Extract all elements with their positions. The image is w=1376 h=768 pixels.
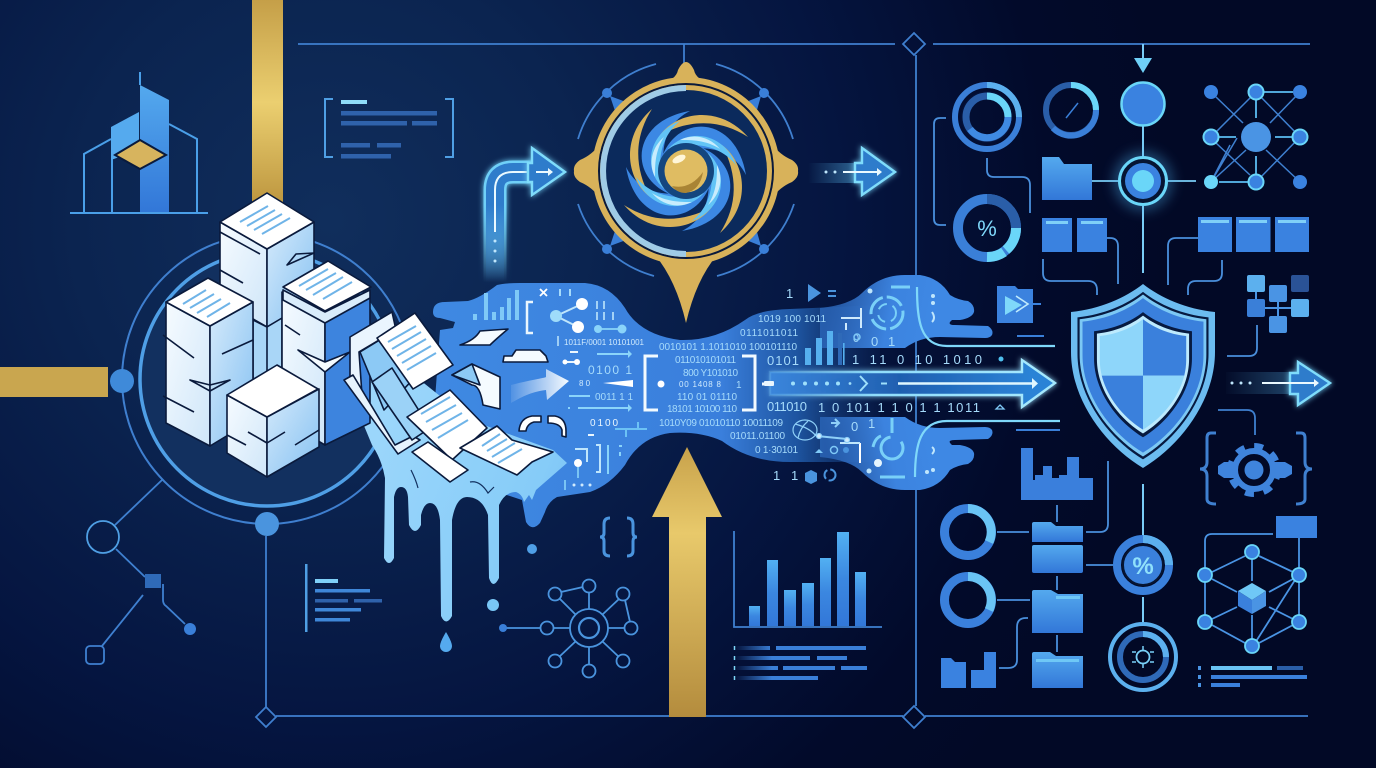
ring icon top <box>871 297 903 329</box>
binary text: stream right: 1 0 101 1 1 0 1 1 1011 <box>818 400 980 415</box>
binary text: stream center: 18101 10100 110 <box>667 404 737 415</box>
tab blocks left <box>1042 218 1107 252</box>
connector lines right top <box>934 44 1257 356</box>
binary text: stream center: 0 1·30101 <box>755 445 798 456</box>
paper sheet 2 <box>407 390 487 460</box>
binary text: stream center: 1019 100 1011 <box>758 314 826 325</box>
binary text: stream right: 1 <box>791 468 798 483</box>
top frame line with diamond <box>298 33 1310 706</box>
gold core <box>658 143 714 199</box>
folder-play icon <box>997 286 1041 323</box>
tab blocks right <box>1198 217 1309 252</box>
binary text: stream right: 1 <box>786 286 793 301</box>
folder stack <box>1032 522 1083 688</box>
binary text: stream center: 01011.01100 <box>730 431 785 442</box>
document stack: front <box>227 365 319 477</box>
arrowhead top <box>1134 58 1152 73</box>
binary text: stream right: 1 <box>888 334 895 349</box>
braces icon bottom center <box>600 518 637 556</box>
binary text: stream center: 1 <box>736 380 742 391</box>
node: circle left <box>110 369 134 393</box>
graph cube <box>1198 516 1317 653</box>
hub network icon <box>499 580 638 678</box>
connector lines right bottom <box>997 461 1143 668</box>
vortex emblem <box>574 62 798 323</box>
donut B <box>1046 85 1096 136</box>
ring icon bottom <box>873 418 903 459</box>
stream icons: right glyphs <box>793 284 1060 484</box>
swoosh arrow into vortex <box>494 148 565 282</box>
short lines near folder icon <box>1016 336 1060 430</box>
binary text: stream center: 011010101011 <box>675 355 736 366</box>
binary text: stream center <box>579 314 826 456</box>
text block: lower left lines <box>305 564 382 632</box>
paper flakes <box>452 329 566 437</box>
binary text: stream right: 1 <box>868 416 875 431</box>
node cluster <box>527 289 626 346</box>
binary text: stream right: 1 11 0 10 1010 <box>852 352 982 367</box>
middle data arrow <box>764 360 1055 407</box>
bottom frame line with diamonds <box>256 536 1308 728</box>
arrows and glyphs <box>562 350 647 490</box>
percent donut top: % <box>977 216 997 241</box>
binary text: stream center: 110 01 01110 <box>677 392 737 403</box>
binary text: stream center: 0011 1 1 <box>595 392 633 403</box>
folder icon top <box>1042 157 1092 200</box>
binary text: stream right: 0 <box>853 333 859 345</box>
document stacks <box>163 193 371 477</box>
network: lower left links <box>86 480 196 664</box>
percent donut top <box>958 199 1016 257</box>
gold bar left <box>0 367 108 397</box>
gold arrow up <box>652 447 722 717</box>
percent circle: % <box>1132 553 1154 580</box>
binary text: stream right: 011010 <box>767 399 807 414</box>
donut A <box>955 85 1019 149</box>
central brackets <box>645 356 770 410</box>
liquid drips <box>345 380 567 652</box>
binary text: stream center: 0010101 1.1011010 100101110 <box>659 342 797 353</box>
arrow out of shield <box>1226 362 1330 405</box>
mini bar chart <box>805 331 845 365</box>
skyline bar icon <box>1021 448 1093 500</box>
binary text: stream center: 0111011011 <box>740 328 798 339</box>
binary text: stream right: 0101 <box>767 353 799 368</box>
binary text: stream right: 1 <box>773 468 780 483</box>
text block: chart caption <box>734 646 867 680</box>
paper sheet 1 <box>377 313 453 389</box>
binary text: stream right <box>767 286 982 483</box>
gold frame <box>574 62 798 323</box>
text block: lower right lines <box>1198 666 1307 687</box>
block tree icon <box>1247 275 1309 333</box>
text block: bracketed notes <box>325 99 453 158</box>
document stack: left <box>163 278 253 446</box>
white arrow in stream <box>511 369 569 403</box>
glowing hub node <box>1113 151 1173 211</box>
binary text: stream center: 0100 <box>590 418 618 429</box>
concentric circles around document stacks <box>122 234 412 524</box>
vortex outer arcs <box>578 64 794 276</box>
percent circle <box>1117 539 1169 591</box>
binary text: stream center: 800 Y101010 <box>683 368 738 379</box>
icon: building <box>70 72 208 213</box>
globe with link <box>793 420 850 442</box>
bar chart <box>734 531 882 627</box>
arrow out of vortex <box>806 148 895 195</box>
circuit gauge <box>1110 624 1176 690</box>
document stack: right <box>282 261 371 445</box>
bar chart small <box>473 290 519 320</box>
small folder icons <box>941 652 996 688</box>
data stream blob <box>430 275 992 527</box>
pale inner ring <box>603 88 686 254</box>
circle node top <box>1122 82 1164 126</box>
binary text: stream right: 0 <box>851 419 858 434</box>
stream icons: left data glyphs <box>473 289 770 490</box>
network diagram top right <box>1204 84 1308 190</box>
document stack: back tall <box>220 193 314 380</box>
swirl arms <box>624 109 748 233</box>
gold bar top <box>252 0 283 205</box>
paper sheet 3 <box>460 426 553 475</box>
binary text: stream center: 00 1408 8 <box>679 380 722 389</box>
binary text: stream right: 0 <box>871 334 878 349</box>
ring gauges <box>944 508 992 624</box>
gear icon with braces <box>1200 410 1312 504</box>
binary text: stream center: 1010Y09 01010110 10011109 <box>659 418 783 429</box>
node: circle bottom <box>255 512 279 536</box>
flying papers <box>344 312 566 482</box>
binary text: stream center: 0100 1 <box>588 363 632 377</box>
binary small caption: 1011F/0001 10101001 <box>564 338 645 347</box>
binary text: stream center: 8 0 <box>579 379 591 388</box>
shield <box>1071 284 1215 468</box>
